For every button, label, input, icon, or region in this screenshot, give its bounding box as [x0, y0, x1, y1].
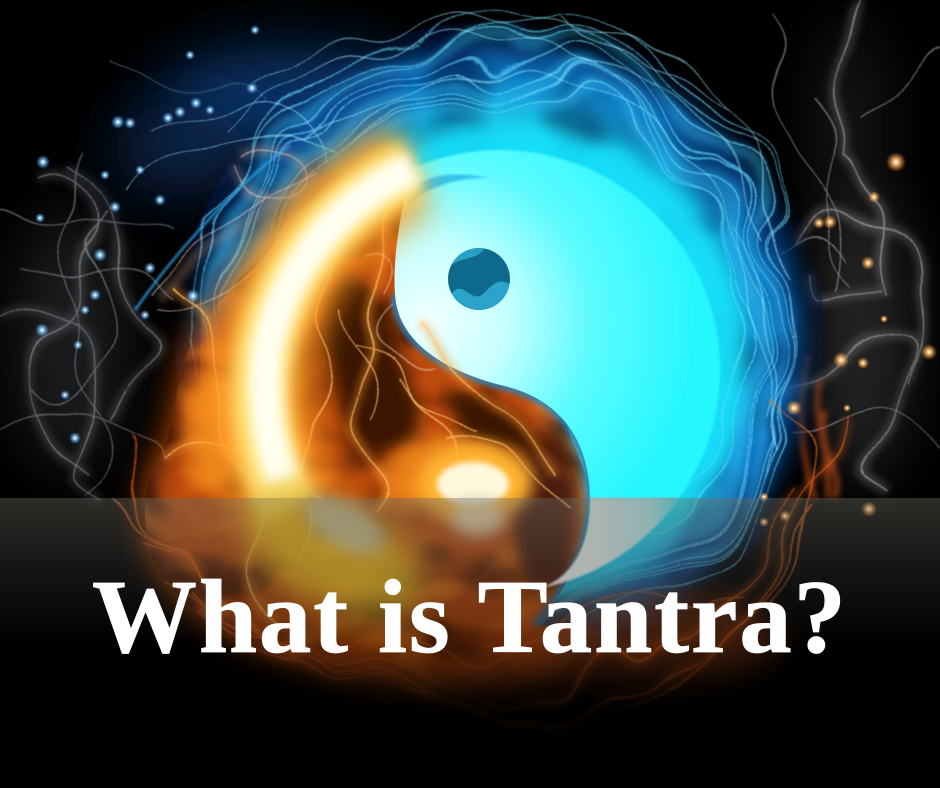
soft smoke haze: [15, 20, 910, 480]
washed-out tones under the band: [228, 470, 679, 640]
fire wisps: [160, 190, 570, 620]
blue sliver above teardrop: [408, 174, 490, 205]
blue energy ring: [110, 20, 825, 670]
white smoke on the right: [764, 0, 940, 500]
bright flame core: [417, 444, 533, 520]
pale wisps at the flame shoulder: [135, 145, 440, 368]
yin-yang disc: [280, 150, 720, 590]
bright flame arc: [261, 168, 414, 510]
fire body: [145, 158, 600, 695]
flame texture: dark streaks: [145, 190, 587, 664]
blue wisps: [130, 20, 802, 658]
orange mid flames: [185, 370, 505, 515]
white smoke on the left: [0, 60, 270, 500]
grey crescent of the disc: [530, 498, 679, 590]
dark patches in the flames: [319, 270, 577, 590]
yin-yang dark dot: [448, 248, 510, 310]
dim lower flames: [120, 400, 850, 717]
flame texture: light streaks: [145, 226, 587, 694]
grey flame highlight: [295, 483, 395, 567]
blue edge on the s-curve: [395, 295, 590, 625]
olive flame glow: [228, 470, 442, 640]
title: What is Tantra?: [92, 558, 846, 675]
blue sparkles: [35, 25, 260, 444]
orange sparkles: [759, 152, 937, 527]
translucent title band: [0, 498, 940, 788]
orange wisp on the right: [801, 355, 837, 500]
